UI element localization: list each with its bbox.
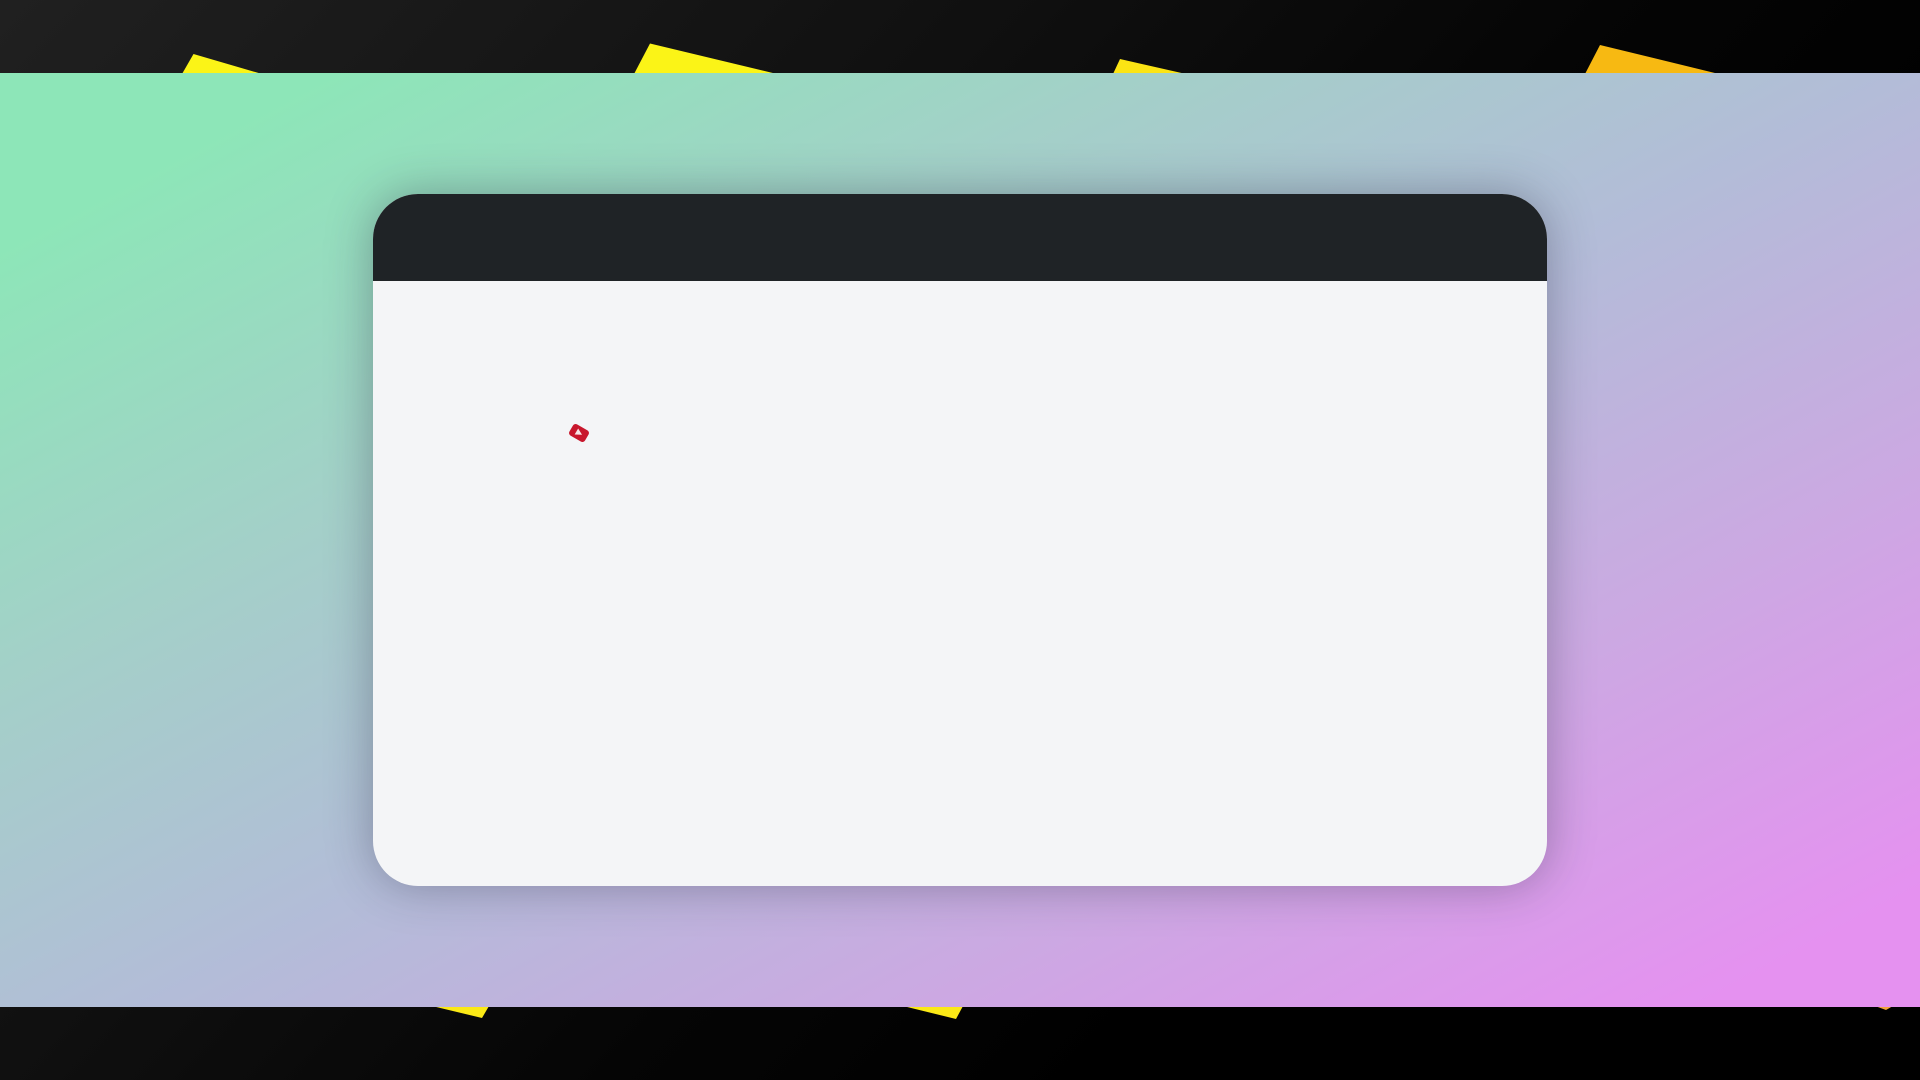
top shape 3 xyxy=(1113,59,1186,74)
top shape 2 xyxy=(634,44,777,74)
bottom shape 1 xyxy=(432,1006,489,1018)
bottom shape 3 xyxy=(1875,1006,1893,1010)
top shape 1 xyxy=(182,54,262,74)
top shape 4 xyxy=(1585,45,1719,74)
bottom shape 2 xyxy=(903,1006,963,1019)
card header bar xyxy=(373,194,1547,281)
card panel xyxy=(373,194,1547,886)
icon: red play button xyxy=(569,424,589,442)
